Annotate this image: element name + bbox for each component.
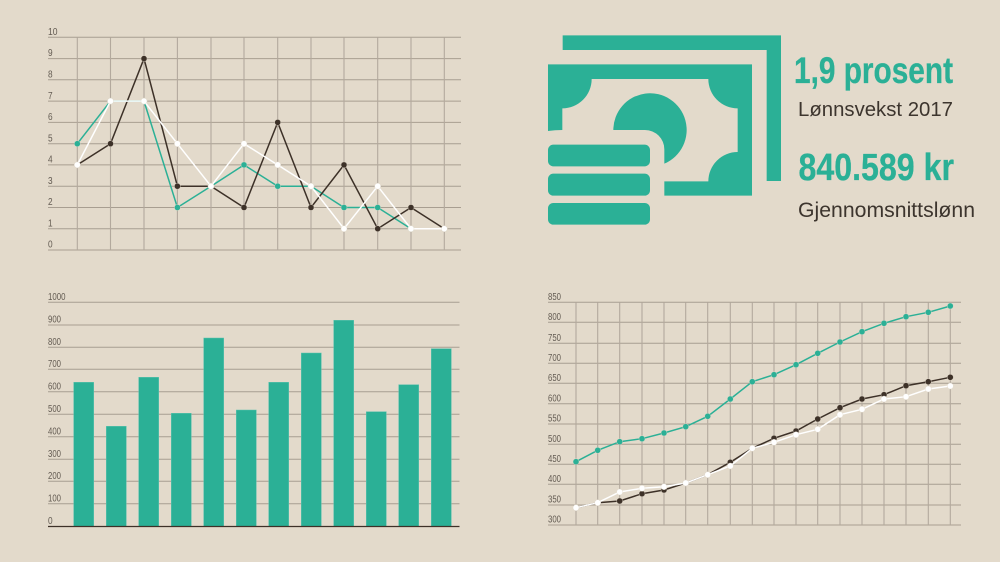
y-axis labels: 350 — [548, 494, 561, 506]
panel: bar chart bottom left — [48, 292, 460, 527]
y-axis labels: 500 — [548, 434, 561, 445]
y-axis labels — [48, 292, 66, 527]
stat: wage growth — [794, 50, 953, 121]
bars — [74, 320, 451, 526]
icon: banknotes and coins — [548, 35, 781, 225]
y-axis labels — [548, 292, 561, 526]
y-axis labels: 700 — [48, 359, 61, 370]
y-axis labels: 7 — [48, 91, 53, 102]
y-axis labels: 300 — [548, 514, 561, 526]
stat: average salary: Gjennomsnittslønn — [798, 199, 975, 222]
y-axis labels: 650 — [548, 373, 561, 384]
y-axis labels: 10 — [48, 27, 58, 38]
y-axis labels: 400 — [548, 474, 561, 485]
series: dark line — [573, 374, 953, 511]
y-axis labels: 200 — [48, 471, 61, 482]
y-axis labels: 850 — [548, 292, 561, 303]
y-axis labels: 300 — [48, 449, 61, 460]
y-axis labels: 9 — [48, 48, 53, 59]
y-axis labels: 0 — [48, 240, 53, 251]
y-axis labels: 4 — [48, 155, 53, 166]
y-axis labels: 2 — [48, 197, 53, 208]
y-axis labels: 6 — [48, 112, 53, 123]
series: teal line — [74, 98, 447, 232]
y-axis labels: 5 — [48, 133, 53, 144]
series: dark line — [74, 56, 447, 232]
series: teal line — [573, 303, 953, 465]
stat: wage growth: Lønnsvekst 2017 — [798, 98, 953, 121]
y-axis labels: 900 — [48, 314, 61, 326]
y-axis labels: 3 — [48, 176, 53, 187]
y-axis labels: 600 — [48, 381, 61, 392]
stat: average salary: 840.589 kr — [798, 147, 954, 189]
y-axis labels: 0 — [48, 516, 53, 527]
y-axis labels: 1 — [48, 218, 53, 229]
y-axis labels: 8 — [48, 70, 53, 80]
y-axis labels: 600 — [548, 394, 561, 404]
y-axis labels: 1000 — [48, 292, 66, 303]
y-axis labels: 700 — [548, 353, 561, 364]
y-axis labels: 450 — [548, 454, 561, 465]
stat: wage growth: 1,9 prosent — [794, 50, 953, 91]
y-axis labels: 800 — [48, 337, 61, 348]
series: white line — [74, 98, 447, 232]
panel: line chart top left — [48, 27, 461, 251]
panel: line chart bottom right — [548, 292, 961, 526]
y-axis labels: 400 — [48, 426, 61, 437]
series: white line — [573, 383, 953, 511]
y-axis labels: 750 — [548, 333, 561, 344]
y-axis labels: 550 — [548, 414, 561, 424]
y-axis labels: 500 — [48, 404, 61, 415]
y-axis labels: 100 — [48, 493, 61, 504]
stat: average salary — [798, 147, 975, 222]
y-axis labels: 800 — [548, 312, 561, 323]
y-axis labels — [48, 27, 58, 251]
